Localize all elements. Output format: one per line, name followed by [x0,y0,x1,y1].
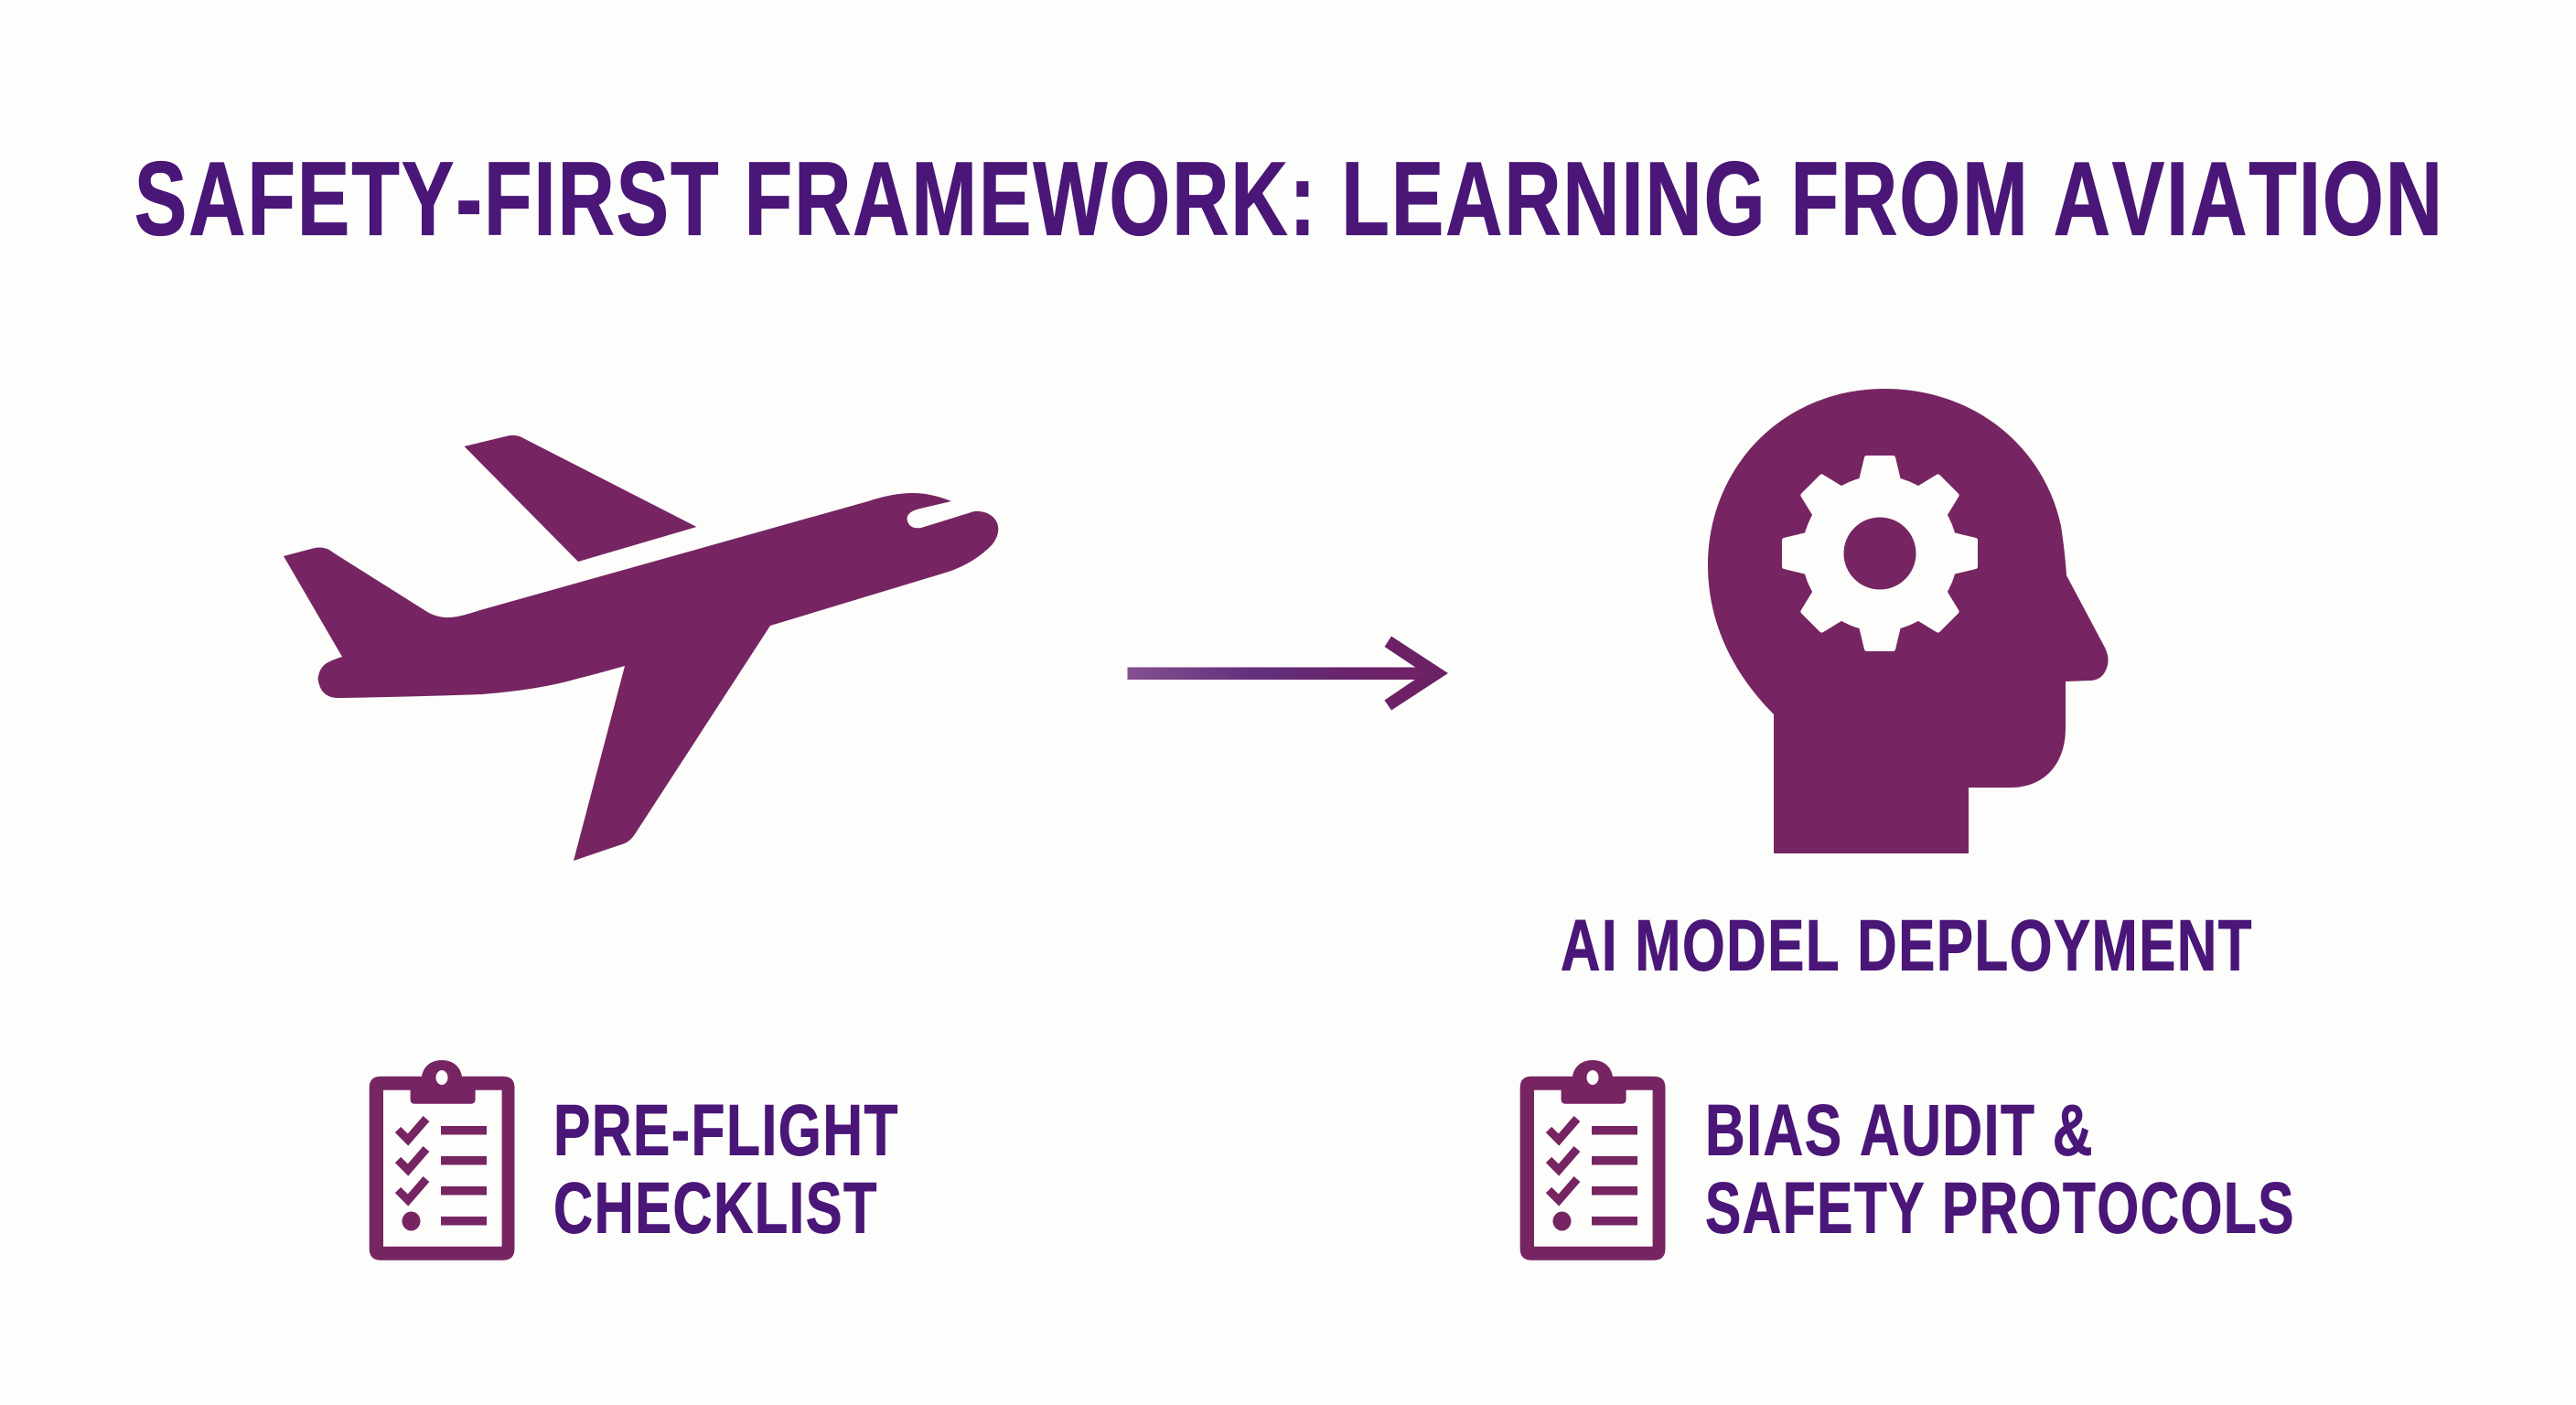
icon: clipboard left [370,1060,514,1260]
checklist items [398,1119,426,1200]
icon: airplane [284,435,998,861]
arrow shaft [1127,668,1429,680]
icon: head with gear [1708,389,2109,853]
clipboard clip [1562,1084,1626,1104]
arrow head [1385,637,1448,710]
icon: clipboard right [1520,1060,1665,1260]
label: pre-flight checklist [553,1089,899,1249]
label: bias audit and safety protocols [1705,1089,2295,1249]
airplane far wing [465,435,697,562]
clipboard hole [435,1070,448,1085]
clipboard frame [1520,1060,1665,1260]
gear [1782,456,1978,651]
head silhouette [1708,389,2109,853]
checklist items [1549,1119,1577,1200]
arrow [1127,637,1448,710]
clipboard clip [411,1084,476,1104]
clipboard hole [1586,1070,1599,1085]
airplane body and near wing [284,493,998,861]
clipboard frame [370,1060,514,1260]
